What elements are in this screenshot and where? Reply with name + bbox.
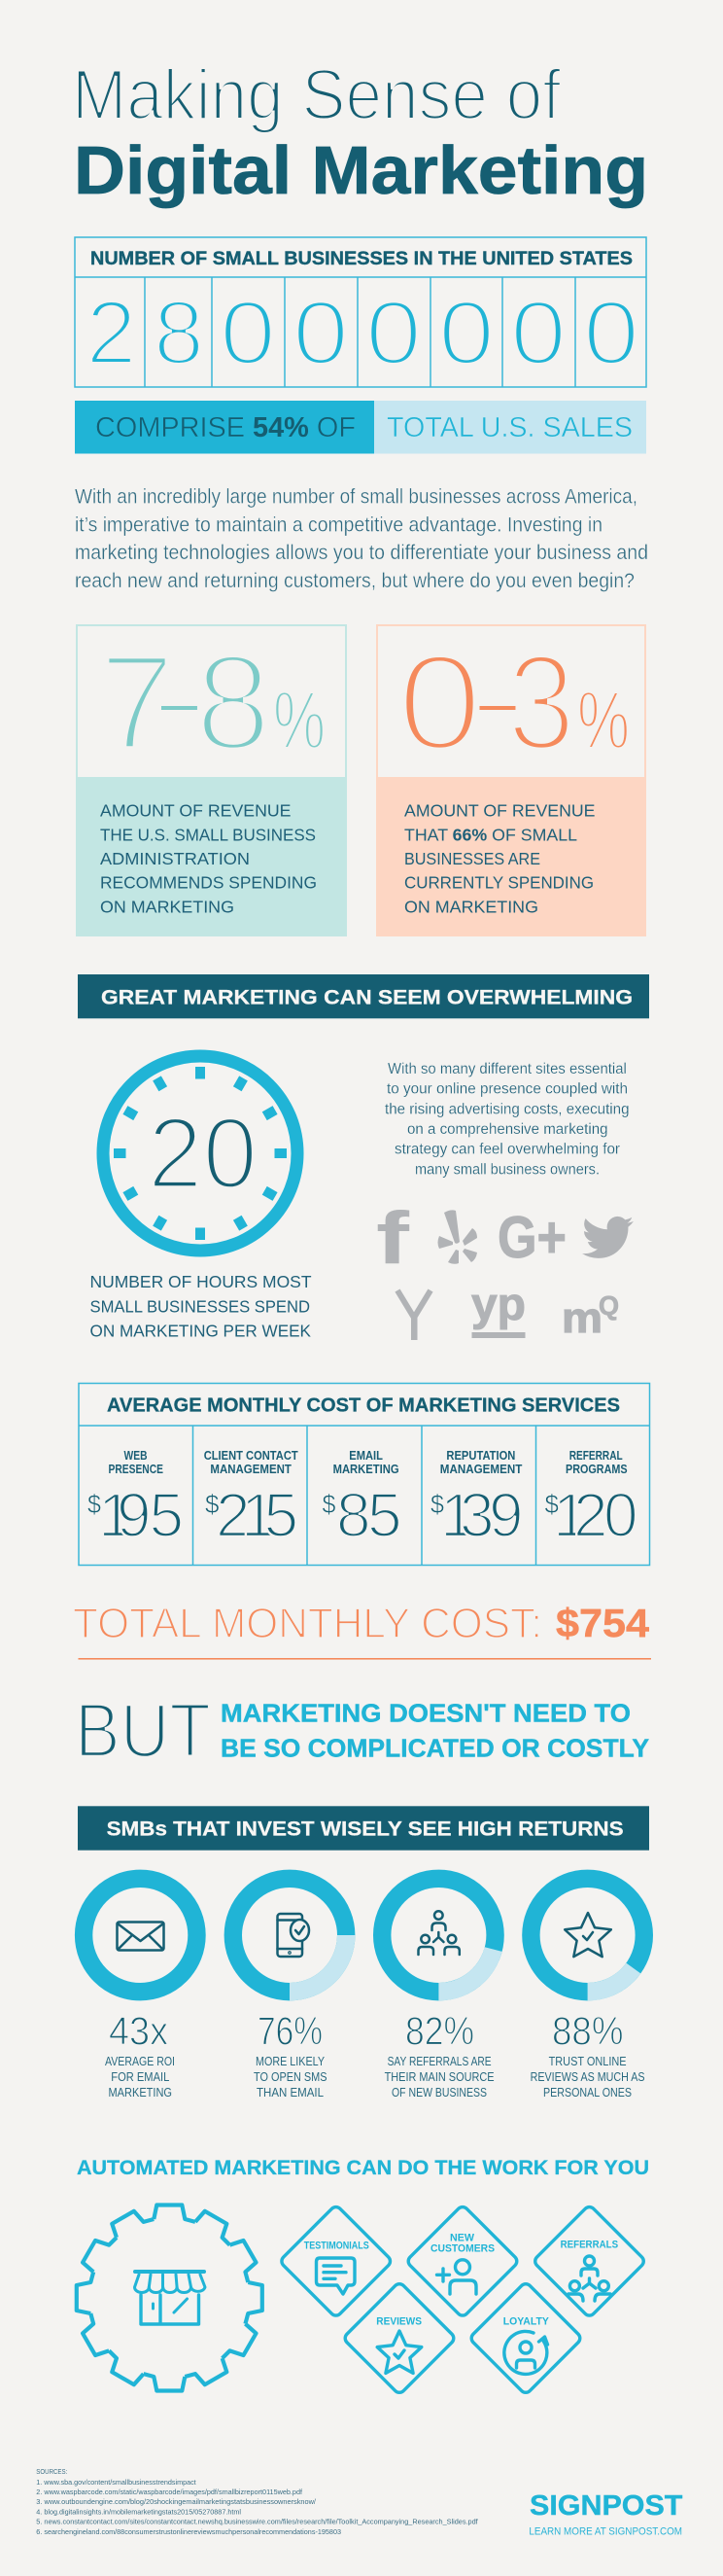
description — [404, 800, 596, 917]
icon: gear with storefront — [76, 2205, 262, 2391]
column: client contact management: 215 — [216, 1480, 298, 1550]
clock caption: ON MARKETING PER WEEK — [89, 1322, 311, 1341]
column: client contact management: MANAGEMENT — [210, 1463, 292, 1476]
icon: star with check — [377, 2331, 422, 2373]
banner: great marketing can seem overwhelming: GREAT MARKETING CAN SEEM OVERWHELMING — [101, 986, 633, 1009]
sources: 2. www.waspbarcode.com/static/waspbarcode/images/pdf/smallbizreport0115web.pdf — [36, 2488, 303, 2496]
clock ticks — [114, 1067, 287, 1240]
icon: people network — [568, 2256, 610, 2301]
digits 28000000: 0 — [365, 282, 422, 383]
intro paragraph: reach new and returning customers, but where do you even begin? — [75, 569, 635, 592]
stat: percent sign: % — [273, 675, 326, 766]
logo: signpost: SIGNPOST — [530, 2490, 683, 2522]
column: email marketing — [323, 1449, 402, 1550]
statement: but marketing doesn't need to be so complicated or costly: BUT — [75, 1687, 211, 1774]
icon: Y stem — [411, 1316, 418, 1340]
table frame — [79, 1383, 649, 1566]
column: referral programs: REFERRAL — [569, 1449, 623, 1463]
caption: TO OPEN SMS — [254, 2069, 327, 2084]
clock caption — [89, 1272, 312, 1341]
stat: 7-8 — [99, 626, 271, 778]
icon: person with return arrow — [504, 2331, 548, 2374]
column: referral programs: $ — [544, 1490, 559, 1519]
icon: chat bubble — [317, 2258, 355, 2294]
column: email marketing: 85 — [336, 1480, 402, 1550]
description: THE U.S. SMALL BUSINESS — [100, 825, 316, 844]
donut remainder — [438, 1950, 494, 1992]
digits 28000000: 0 — [510, 282, 567, 383]
column: email marketing: $ — [323, 1490, 336, 1519]
badge: referrals — [533, 2205, 646, 2318]
description: THAT 66% OF SMALL — [404, 825, 577, 844]
table heading: NUMBER OF SMALL BUSINESSES IN THE UNITED STATES — [90, 248, 633, 269]
column: email marketing: EMAIL — [349, 1449, 383, 1463]
stat: 0-3: 3 — [507, 626, 575, 778]
title — [72, 56, 648, 208]
caption — [531, 2054, 645, 2100]
caption — [254, 2054, 327, 2100]
digits 28000000: 0 — [220, 282, 276, 383]
paragraph: online presence: With so many different sites essential — [388, 1061, 627, 1077]
icon: phone with badge — [278, 1914, 309, 1957]
column: referral programs: PROGRAMS — [566, 1463, 628, 1476]
heading: automated marketing: AUTOMATED MARKETING CAN DO THE WORK FOR YOU — [77, 2156, 649, 2179]
badge: testimonials — [279, 2205, 393, 2318]
caption: THEIR MAIN SOURCE — [385, 2069, 495, 2084]
badge: reviews — [343, 2281, 456, 2395]
stat: 0-3 — [396, 626, 575, 778]
stat: 7-8: 8 — [195, 626, 271, 778]
clock caption: NUMBER OF HOURS MOST — [89, 1272, 312, 1291]
digits 28000000: 0 — [293, 282, 349, 383]
value: 88% — [552, 2008, 624, 2053]
column: reputation management: MANAGEMENT — [440, 1463, 523, 1476]
caption: MORE LIKELY — [256, 2054, 325, 2068]
panel: number of small businesses — [75, 237, 646, 387]
storefront — [134, 2272, 205, 2324]
call to action: LEARN MORE AT SIGNPOST.COM — [529, 2526, 682, 2538]
description: ADMINISTRATION — [100, 849, 250, 868]
title line: Digital Marketing: Digital Marketing — [74, 132, 648, 208]
bar: comprise 54% of total sales — [75, 401, 646, 453]
clock caption: SMALL BUSINESSES SPEND — [89, 1296, 310, 1316]
title line: Making Sense of: Making Sense of — [72, 56, 562, 134]
badge: new customers — [406, 2205, 519, 2318]
sources: 3. www.outboundengine.com/blog/20shockingemailmarketingstatsbusinessownersknow/ — [36, 2497, 317, 2506]
icon: mapquest m: m — [562, 1294, 602, 1342]
paragraph: online presence: the rising advertising costs, executing — [385, 1101, 630, 1117]
label: TESTIMONIALS — [304, 2240, 369, 2251]
label: NEW — [450, 2232, 475, 2243]
icon: star with check — [565, 1913, 611, 1957]
caption: PERSONAL ONES — [543, 2085, 632, 2100]
stat: percent sign: % — [577, 675, 630, 766]
column: referral programs: 120 — [553, 1480, 638, 1550]
sources — [36, 2467, 479, 2536]
value: 76% — [258, 2008, 323, 2053]
donut remainder — [290, 1935, 346, 1992]
description — [100, 800, 317, 917]
caption — [385, 2054, 495, 2100]
description: RECOMMENDS SPENDING — [100, 873, 317, 893]
icon: yelp — [437, 1210, 477, 1264]
badge: loyalty — [469, 2281, 582, 2395]
stat: 43x ROI for email — [84, 1879, 196, 2100]
column: email marketing: MARKETING — [333, 1463, 399, 1476]
panel: current 0-3% — [376, 625, 646, 936]
icon: yellow pages: yp — [471, 1278, 526, 1329]
description: AMOUNT OF REVENUE — [404, 800, 596, 820]
column: reputation management: REPUTATION — [446, 1449, 515, 1463]
icon: twitter — [582, 1217, 634, 1258]
gear outline — [76, 2205, 262, 2391]
caption: TRUST ONLINE — [549, 2054, 627, 2068]
icon: facebook: f — [376, 1197, 410, 1280]
logo: signpost — [529, 2490, 683, 2538]
total value: $754 — [556, 1601, 649, 1645]
column: web presence: $ — [87, 1490, 101, 1519]
caption: AVERAGE ROI — [105, 2054, 175, 2068]
icon: mapquest Q: Q — [599, 1290, 619, 1321]
description: ON MARKETING — [404, 898, 538, 917]
intro paragraph: marketing technologies allows you to differentiate your business and — [75, 541, 648, 564]
stat: 88% trust reviews — [531, 1879, 645, 2100]
banner: SMBs that invest wisely: SMBs THAT INVEST WISELY SEE HIGH RETURNS — [107, 1817, 624, 1840]
stat: 0-3: 0 — [396, 626, 482, 778]
description: CURRENTLY SPENDING — [404, 873, 594, 893]
column: referral programs — [544, 1449, 638, 1550]
paragraph: online presence — [385, 1061, 630, 1178]
statement text line 1: MARKETING DOESN'T NEED TO — [221, 1701, 631, 1728]
label: comprise 54% of: COMPRISE 54% OF — [95, 412, 356, 443]
digits 28000000: 0 — [438, 282, 495, 383]
stat: 7-8: – — [161, 671, 198, 736]
paragraph: online presence: many small business owners. — [415, 1161, 600, 1178]
paragraph: online presence: on a comprehensive marketing — [407, 1121, 608, 1138]
sources: 1. www.sba.gov/content/smallbusinesstrendsimpact — [36, 2478, 196, 2487]
sources: 5. news.constantcontact.com/sites/constantcontact.newshq.businesswire.com/files/research/file/Toolkit_Accompanying_Research_Slides.pdf — [36, 2518, 479, 2526]
stat: 0-3: – — [480, 671, 516, 736]
paragraph: online presence: strategy can feel overwhelming for — [395, 1142, 620, 1158]
digits 28000000: 2 — [86, 282, 136, 383]
intro paragraph: With an incredibly large number of small businesses across America, — [75, 484, 637, 508]
clock: 20 hours — [103, 1056, 297, 1251]
icon: yahoo Y — [397, 1290, 430, 1318]
label: REFERRALS — [561, 2240, 618, 2251]
caption — [105, 2054, 175, 2100]
caption: SAY REFERRALS ARE — [388, 2054, 492, 2068]
description: AMOUNT OF REVENUE — [100, 800, 292, 820]
label: CUSTOMERS — [430, 2243, 495, 2255]
icon: people network — [418, 1911, 460, 1955]
value: 43x — [109, 2008, 168, 2053]
column: reputation management: $ — [430, 1490, 444, 1519]
statement: but marketing doesn't need to be so complicated or costly — [75, 1687, 649, 1774]
intro paragraph: it’s imperative to maintain a competitive advantage. Investing in — [75, 512, 602, 536]
donut remainder — [588, 1968, 634, 1992]
icon: google plus: G+ — [498, 1205, 567, 1270]
digits 28000000: 8 — [154, 282, 204, 383]
icon: yellow pages underline — [472, 1332, 525, 1338]
icons: social logos — [376, 1197, 634, 1342]
column: client contact management — [204, 1449, 298, 1550]
paragraph: online presence: to your online presence coupled with — [387, 1081, 628, 1098]
caption: REVIEWS AS MUCH AS — [531, 2069, 645, 2084]
banner: SMBs that invest wisely — [78, 1806, 649, 1851]
digits 28000000 — [86, 282, 639, 383]
sources: 4. blog.digitalinsights.in/mobilemarketingstats2015/05270887.html — [36, 2507, 241, 2516]
clock number: 20 — [148, 1097, 258, 1210]
intro paragraph — [75, 484, 648, 592]
caption: MARKETING — [109, 2085, 172, 2100]
stat: 76% open SMS — [233, 1879, 346, 2100]
panel: recommended 7-8% — [76, 625, 347, 936]
caption: FOR EMAIL — [111, 2069, 169, 2084]
label: total U.S. sales: TOTAL U.S. SALES — [387, 412, 633, 443]
caption: OF NEW BUSINESS — [392, 2085, 487, 2100]
table heading: AVERAGE MONTHLY COST OF MARKETING SERVICES — [107, 1395, 620, 1417]
column: web presence — [87, 1449, 184, 1550]
column: client contact management: CLIENT CONTACT — [204, 1449, 298, 1463]
total monthly cost: TOTAL MONTHLY COST: — [73, 1600, 542, 1647]
stat: 7-8: 7 — [99, 626, 175, 778]
icon: person plus — [437, 2260, 476, 2294]
statement text line 2: BE SO COMPLICATED OR COSTLY — [221, 1736, 649, 1763]
sources: SOURCES: — [36, 2467, 67, 2476]
column: client contact management: $ — [205, 1490, 220, 1519]
stat: 82% referrals — [382, 1879, 496, 2100]
description: BUSINESSES ARE — [404, 849, 540, 868]
description: ON MARKETING — [100, 898, 234, 917]
label: LOYALTY — [503, 2315, 549, 2327]
column: web presence: 195 — [98, 1480, 184, 1550]
table frame — [75, 237, 646, 387]
column: web presence: WEB — [124, 1449, 148, 1463]
column: reputation management — [430, 1449, 524, 1550]
column: reputation management: 139 — [440, 1480, 524, 1550]
banner: great marketing can seem overwhelming — [78, 974, 649, 1018]
column: web presence: PRESENCE — [109, 1463, 163, 1476]
table: average monthly cost of marketing services — [79, 1383, 649, 1566]
sources: 6. searchengineland.com/88consumerstrustonlinereviewsmuchpersonalrecommendations-195803 — [36, 2527, 341, 2536]
value: 82% — [405, 2008, 474, 2053]
digits 28000000: 0 — [583, 282, 639, 383]
icon: envelope — [117, 1922, 163, 1951]
label: REVIEWS — [376, 2315, 422, 2327]
caption: THAN EMAIL — [257, 2085, 324, 2100]
